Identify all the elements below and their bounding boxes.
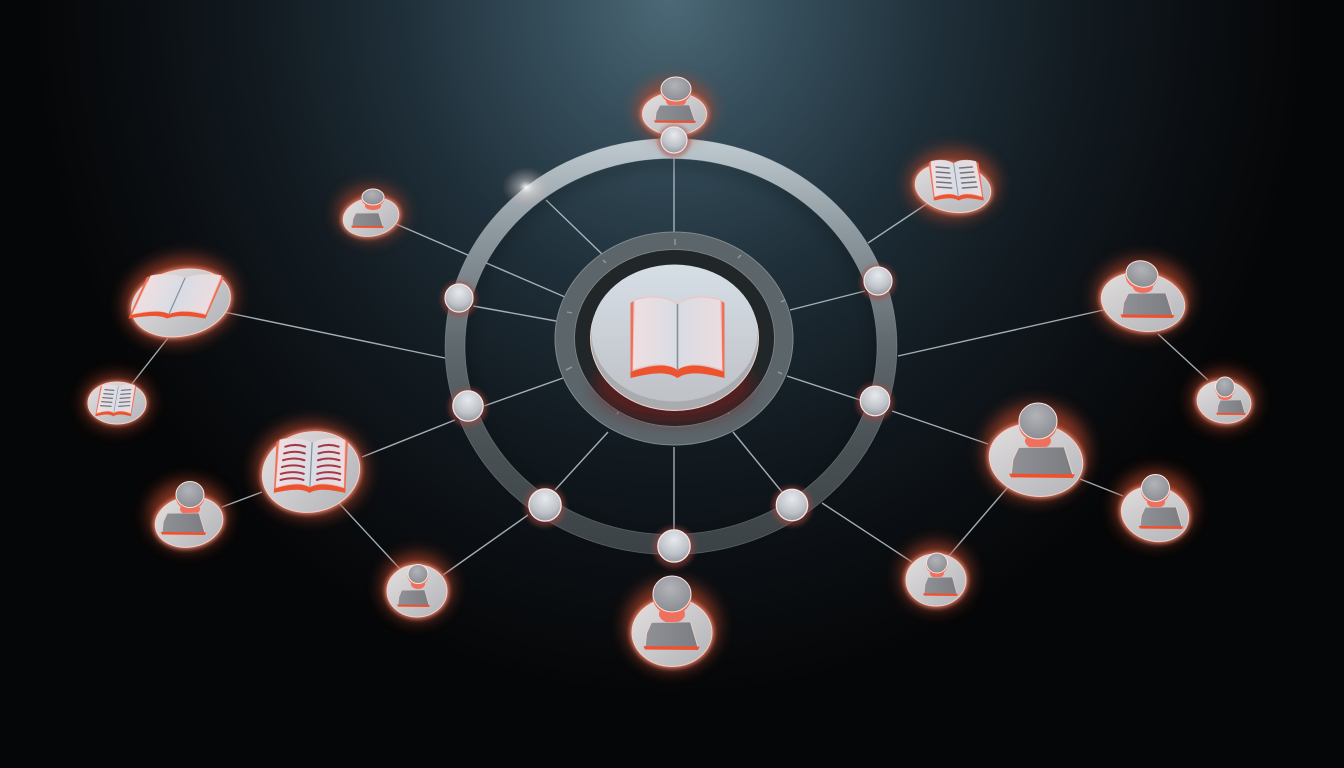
sphere: top of ring (657, 124, 691, 158)
outer ring (445, 138, 897, 554)
red under-glow (596, 346, 752, 422)
person: upper right (1094, 257, 1192, 340)
person: bottom right (901, 543, 971, 609)
book: left (116, 247, 244, 353)
inner ring (555, 232, 793, 445)
connector spheres on the ring (441, 264, 896, 568)
central disc (590, 264, 758, 410)
ring tick marks (566, 239, 785, 414)
person: top (636, 77, 712, 140)
person: bottom left (382, 554, 452, 620)
person: lower left (149, 481, 229, 555)
book: middle left (252, 420, 370, 524)
person: far right (1191, 372, 1257, 430)
central hub (555, 232, 793, 445)
person: upper left (338, 187, 404, 243)
book: far left (84, 376, 150, 428)
person: large right (981, 403, 1091, 506)
highlight spark on outer ring (502, 167, 550, 207)
dark well (574, 250, 774, 426)
person: bottom centre (626, 576, 718, 670)
central open book (630, 297, 724, 378)
connector lines (131, 110, 1208, 575)
book: top right (909, 150, 997, 221)
person: right (1113, 471, 1197, 551)
